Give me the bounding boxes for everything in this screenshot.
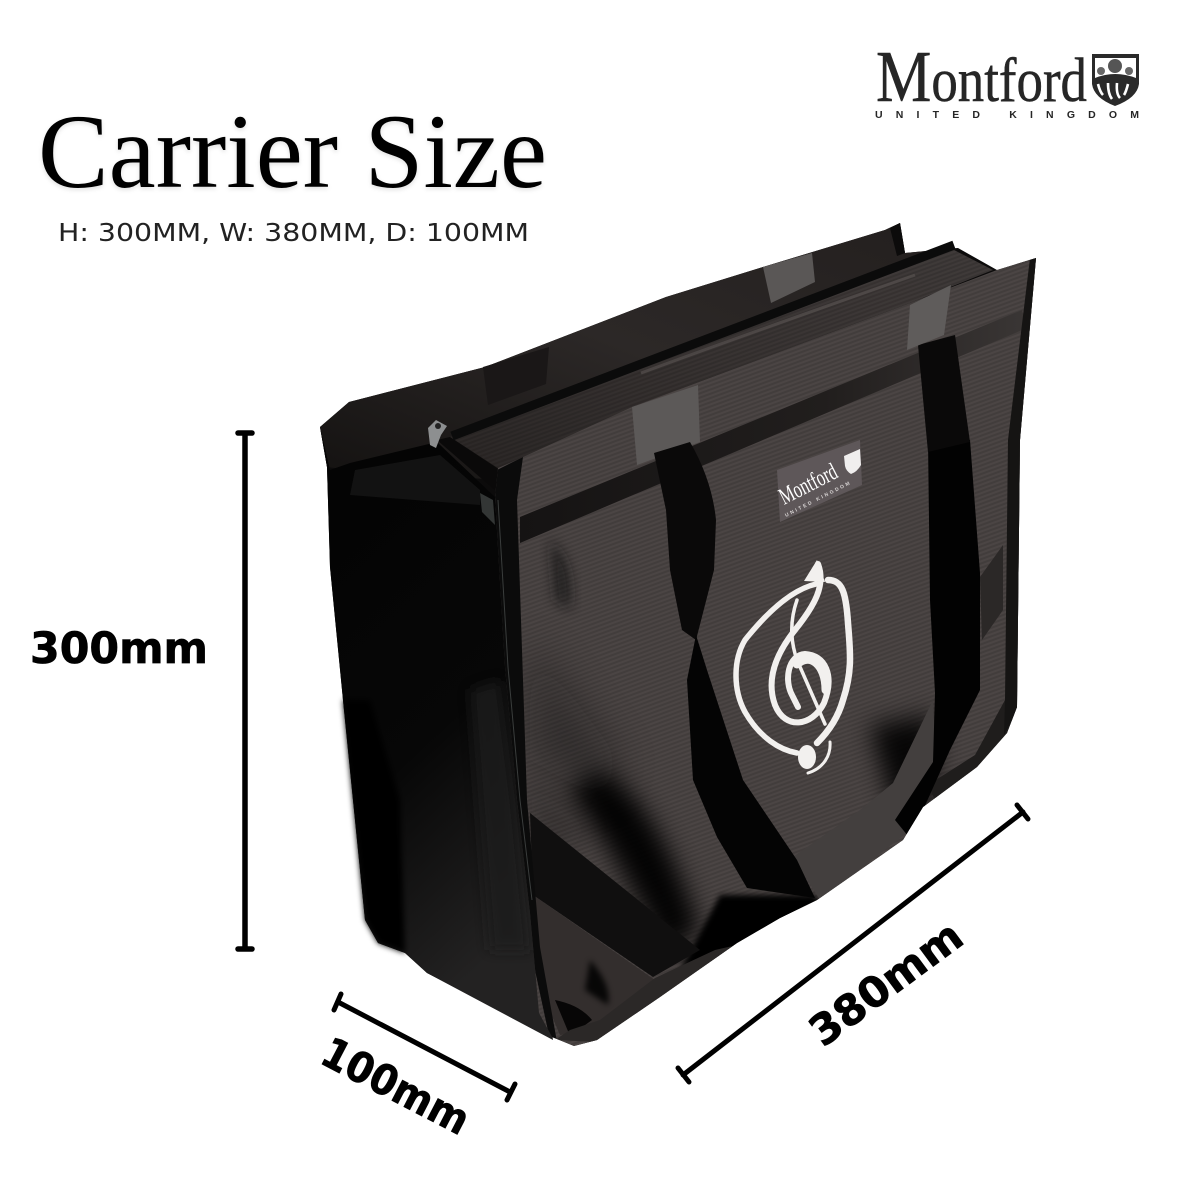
right strap upper bbox=[918, 335, 970, 452]
label shield bbox=[844, 449, 861, 474]
left strap upper bbox=[654, 442, 716, 640]
logo tagline: UNITED KINGDOM bbox=[875, 109, 1139, 121]
fabric weave bbox=[507, 260, 1030, 1045]
front panel shading bbox=[530, 540, 935, 970]
left handle tab bbox=[632, 385, 700, 465]
logo wordmark: Montford bbox=[876, 36, 1087, 117]
zipper bbox=[452, 245, 954, 436]
right hem bbox=[928, 700, 1017, 800]
clef top tip bbox=[804, 560, 825, 582]
lid bbox=[450, 250, 993, 468]
label tagline: UNITED KINGDOM bbox=[784, 481, 851, 519]
lid weave bbox=[450, 250, 993, 468]
right handle tab bbox=[907, 285, 951, 350]
side panel top band bbox=[350, 455, 480, 505]
side panel bbox=[320, 427, 553, 1040]
label brand text: Montford bbox=[775, 459, 842, 510]
back right tab bbox=[763, 253, 815, 303]
clef ring right arc bbox=[817, 580, 850, 743]
bottom corner folds bbox=[533, 895, 655, 1036]
bag silhouette base bbox=[320, 223, 1036, 1046]
clef thick bowl bbox=[797, 659, 826, 690]
front panel bbox=[480, 250, 1050, 1060]
bottom hem bbox=[555, 945, 737, 1042]
back panel bbox=[320, 223, 958, 480]
product label bbox=[775, 440, 862, 522]
treble clef logo bbox=[736, 560, 850, 773]
clef body bbox=[772, 564, 829, 722]
back panel inner edge bbox=[890, 223, 905, 256]
height dimension marker bbox=[238, 433, 252, 949]
lid corner flap bbox=[437, 437, 500, 492]
right piping bbox=[1004, 258, 1038, 735]
title: Carrier Size bbox=[38, 93, 547, 210]
logo: Montford United Kingdom bbox=[875, 36, 1139, 121]
left strap lower bbox=[687, 635, 815, 898]
logo shield bbox=[1092, 54, 1139, 106]
back left tab bbox=[483, 347, 549, 405]
clef note tail bbox=[808, 742, 830, 773]
front webbing band bbox=[520, 310, 1027, 543]
left front piping bbox=[495, 457, 557, 1042]
bag illustration bbox=[320, 223, 1050, 1060]
clef note head bbox=[798, 745, 816, 769]
subtitle dimensions: H: 300MM, W: 380MM, D: 100MM bbox=[58, 218, 529, 247]
side left dark edge bbox=[343, 700, 405, 953]
bottom left diagonal band bbox=[530, 813, 700, 977]
right lower diagonal band bbox=[980, 545, 1003, 640]
side grey tab bbox=[480, 493, 495, 525]
depth dimension marker bbox=[334, 994, 515, 1100]
clef stem bbox=[792, 600, 825, 724]
side panel sheen bbox=[470, 680, 530, 950]
width dimension marker bbox=[678, 805, 1028, 1082]
zipper pull bbox=[428, 420, 447, 448]
height label: 300mm bbox=[30, 625, 208, 674]
clef ring left arc bbox=[736, 584, 816, 753]
right bottom grey band bbox=[807, 705, 934, 898]
right strap lower bbox=[895, 440, 980, 836]
depth label: 100mm bbox=[313, 1027, 478, 1145]
lid seam bbox=[641, 275, 915, 373]
width label: 380mm bbox=[800, 911, 972, 1056]
